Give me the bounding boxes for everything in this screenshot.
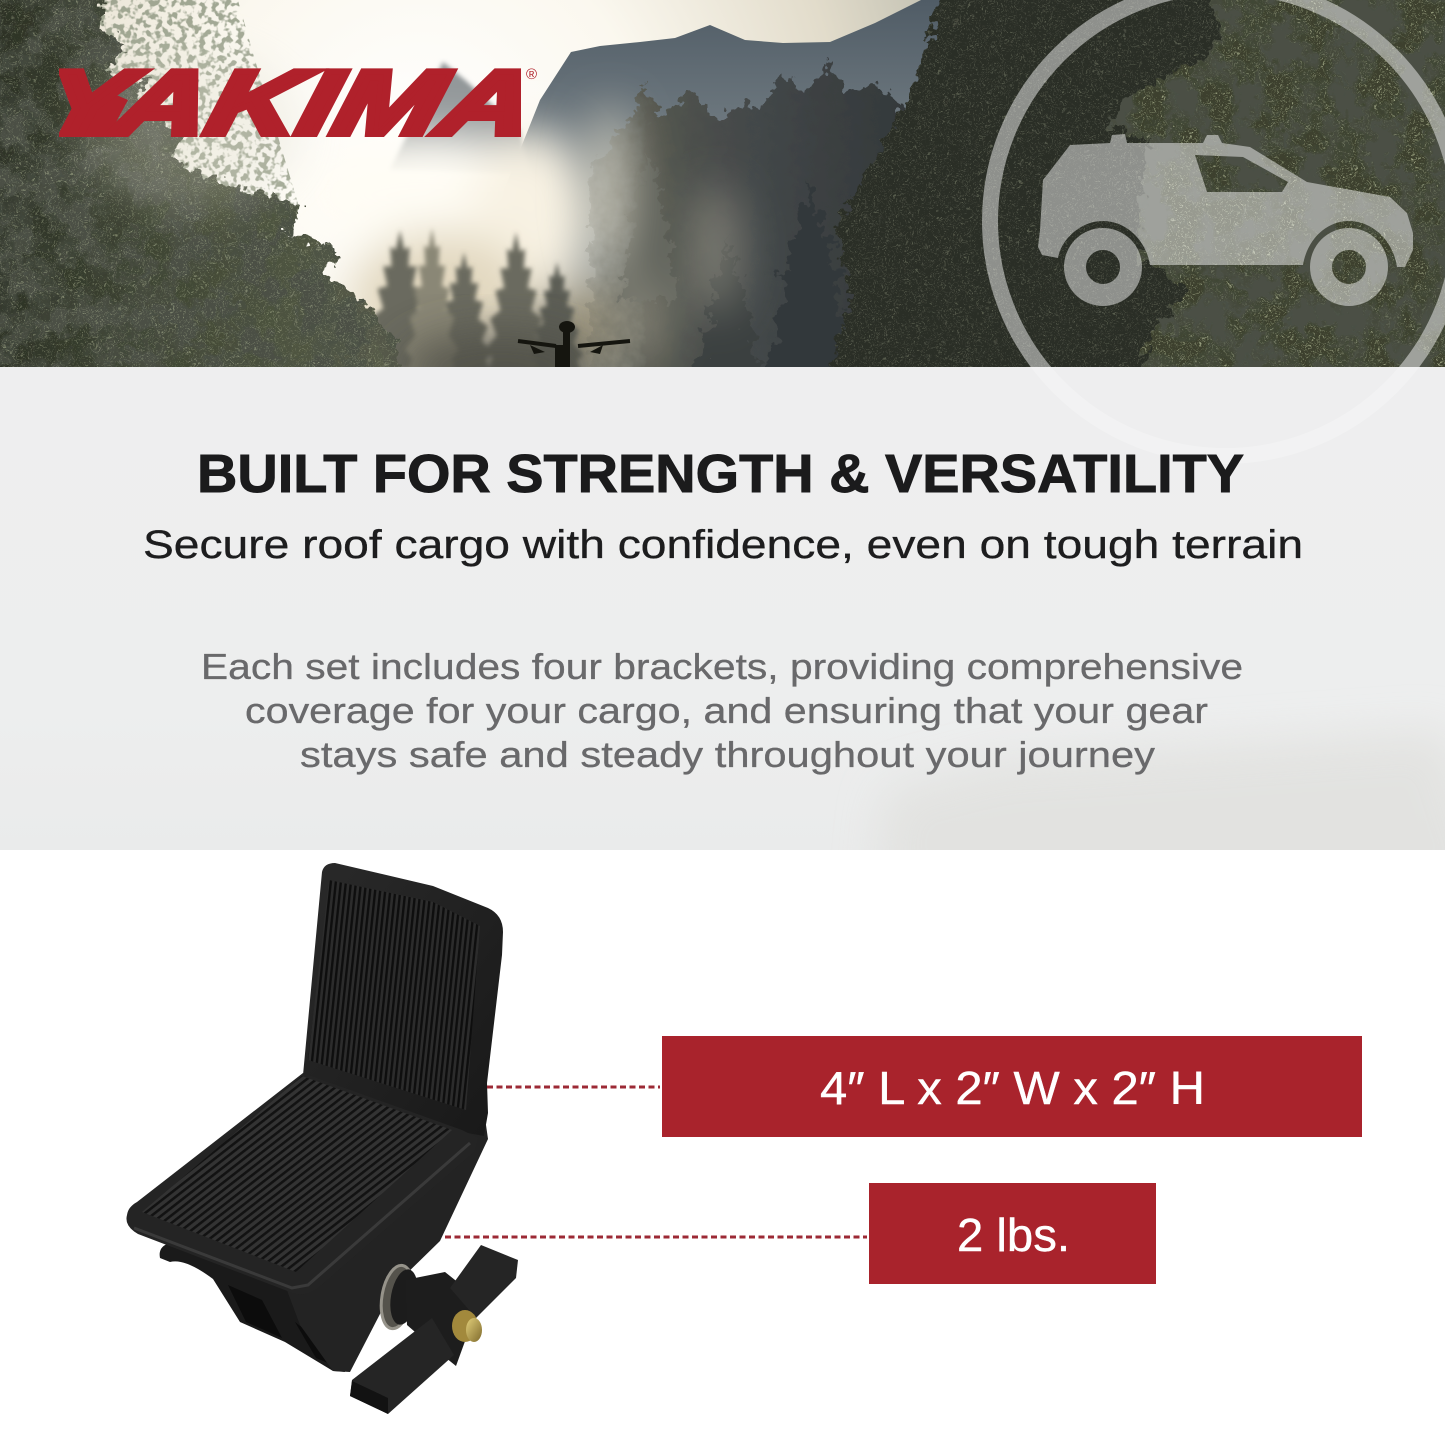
logo: Yakima wordmark: ® <box>526 66 537 83</box>
body copy: coverage for your cargo, and ensuring that your gear <box>245 690 1208 731</box>
callout: weight leader line <box>445 1236 867 1238</box>
icon ring <box>982 0 1445 367</box>
small distant peak behind logo <box>394 60 524 168</box>
threaded bolt <box>452 1310 482 1342</box>
callout: weight <box>869 1183 1156 1284</box>
body copy <box>201 646 1243 775</box>
sparse leaves against the sky <box>98 0 298 206</box>
heading: BUILT FOR STRENGTH & VERSATILITY <box>197 444 1244 504</box>
far mountain range <box>522 0 940 367</box>
washed-out tree at lower right <box>890 739 1445 850</box>
dark base of the conifers <box>402 300 606 367</box>
product: rubber bracket with T-knob <box>126 863 518 1414</box>
spring washers <box>377 1263 422 1331</box>
body copy: Each set includes four brackets, providing comprehensive <box>201 646 1243 687</box>
logo: Yakima wordmark: YAKIMA <box>31 51 547 154</box>
mounting rails under seat <box>160 1244 345 1372</box>
T-knob handle <box>350 1245 518 1414</box>
callout: dimensions: 4″ L x 2″ W x 2″ H <box>820 1062 1205 1114</box>
callout: weight: 2 lbs. <box>957 1209 1070 1261</box>
SUV silhouette <box>1038 134 1413 295</box>
callout: dimensions leader line <box>487 1086 660 1088</box>
hazy distant conifers <box>366 228 583 373</box>
white lower section <box>0 850 1445 1445</box>
ribbed backrest <box>295 863 503 1136</box>
logo: Yakima wordmark <box>59 68 537 137</box>
sky with sun glow <box>96 0 921 284</box>
right tree mass <box>828 0 1445 367</box>
sun haze over left trees <box>80 50 300 210</box>
bicycle handlebars silhouette <box>518 321 630 367</box>
rising mist <box>586 105 741 365</box>
icon: circled SUV with roof cargo <box>982 0 1445 367</box>
panel: forest photo banner <box>0 0 1445 367</box>
left tree mass <box>0 0 402 367</box>
mid forest ridge <box>584 57 906 367</box>
callout: dimensions <box>662 1036 1362 1137</box>
subheading: Secure roof cargo with confidence, even on tough terrain <box>143 523 1303 567</box>
ribbed seat <box>126 1070 478 1294</box>
bracket body <box>285 1120 488 1372</box>
panel: translucent text background <box>0 367 1445 900</box>
body copy: stays safe and steady throughout your journey <box>300 734 1155 775</box>
fog bank <box>336 102 621 367</box>
